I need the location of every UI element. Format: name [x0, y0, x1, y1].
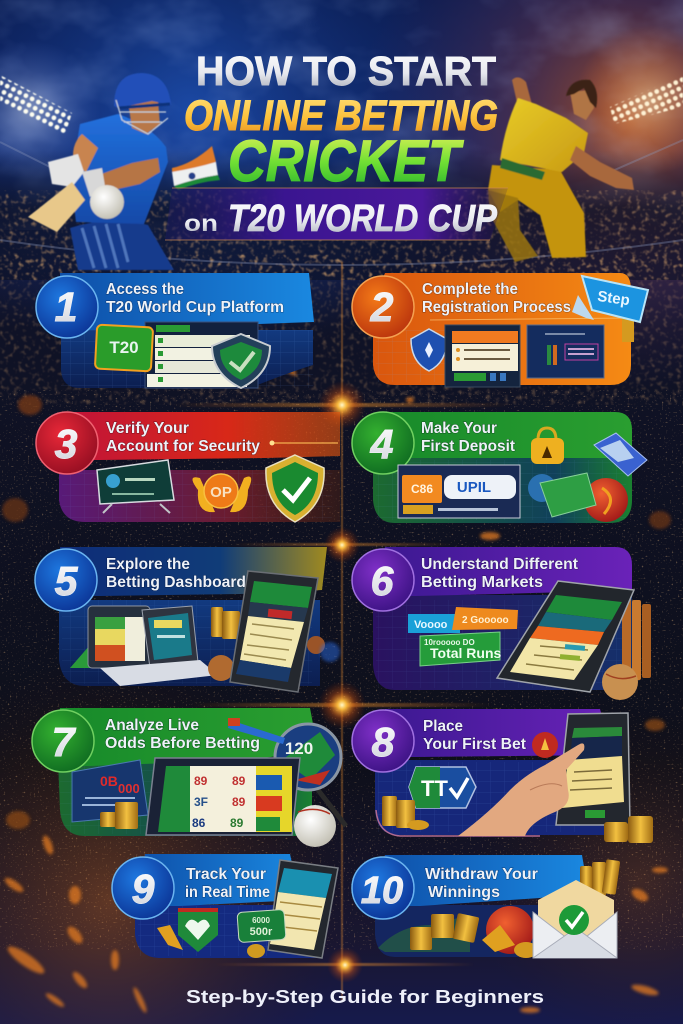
market tags: Voooo [414, 619, 448, 631]
title: How to start online betting cricket on T20 World Cup [165, 48, 508, 240]
panel 6: betting markets [352, 547, 651, 700]
icon: cricket ball [294, 805, 336, 847]
stats screen [527, 325, 604, 378]
footer tagline: Step-by-Step Guide for Beginners [186, 986, 544, 1007]
badge 10 [352, 857, 414, 919]
odds card: 000 [118, 781, 140, 796]
panel 3 background lower [59, 470, 340, 522]
heading 6: Understand Different [421, 556, 578, 573]
phone [556, 713, 630, 825]
heading 2: Complete the [422, 281, 518, 298]
icon: step sign with cursor [572, 276, 648, 342]
title ribbon: on T20 World Cup: on [184, 210, 218, 236]
badge 2 [352, 276, 414, 338]
icon: check shield [266, 455, 324, 522]
phone [230, 571, 318, 692]
badge 9 [112, 857, 174, 919]
panel 9 background lower [135, 905, 320, 958]
icon: red ball with gold [482, 906, 538, 958]
floodlights right [570, 0, 683, 180]
heading 10 [425, 866, 538, 901]
icon: cricket ball [602, 664, 638, 700]
panel 6 background lower [373, 595, 632, 690]
batter arms [73, 134, 98, 172]
form screen [445, 325, 520, 387]
market tags: Total Runs [430, 645, 502, 661]
payment card [398, 465, 520, 518]
icon: blue envelope [594, 433, 647, 476]
phone [268, 860, 338, 958]
badge 6: 6 [371, 558, 395, 604]
heading 9: Track Your [186, 866, 266, 883]
title ribbon: on T20 World Cup [165, 188, 508, 240]
heading 5: Explore the [106, 556, 190, 573]
badge 2: 2 [370, 284, 394, 330]
heading 5 [106, 556, 246, 591]
panel 8 header banner [375, 709, 612, 757]
odds card: 0B [100, 773, 118, 789]
panel 1 header banner [60, 273, 314, 330]
odds tablet: 86 [192, 816, 206, 830]
badge 7: 7 [52, 719, 77, 765]
panel 1: access the platform [36, 273, 314, 388]
panel 3 header banner [60, 412, 340, 460]
heading 6: Betting Markets [421, 574, 543, 591]
title ribbon: on T20 World Cup: T20 WORLD CUP [228, 198, 498, 240]
market tags: 2 Gooooo [462, 615, 509, 626]
odds tablet: 3F [194, 795, 208, 809]
icon: blue shield [411, 329, 447, 371]
cricket ball [90, 185, 124, 219]
badge 1 [36, 276, 98, 338]
bowler belt [500, 158, 545, 180]
panel 10 background lower [375, 905, 585, 957]
icon: monitor [97, 460, 174, 513]
icon: green score card: 500r [250, 926, 273, 938]
market tags: 10rooooo DO [424, 638, 475, 647]
bowler lead arm [570, 146, 634, 190]
badge 8: 8 [372, 719, 395, 765]
panel 8: place first bet [352, 709, 653, 843]
icon: coin stacks [410, 859, 620, 950]
magnifier: 120 [285, 739, 313, 758]
panel 4 header banner [375, 412, 632, 462]
panel 7 header banner [58, 708, 318, 766]
heading 1: T20 World Cup Platform [106, 299, 284, 316]
heading 9: in Real Time [185, 884, 270, 901]
badge 8 [352, 710, 414, 772]
heading 8: Place [423, 718, 463, 735]
heading 7: Odds Before Betting [105, 735, 260, 752]
heading 7 [105, 717, 260, 752]
panel 3: verify account [36, 412, 340, 522]
icon: T20 card [95, 325, 153, 371]
heading 10: Winnings [428, 884, 500, 901]
player: batter in blue [28, 73, 174, 270]
panel 5: dashboard [35, 547, 340, 692]
payment card: UPIL [457, 479, 491, 496]
tablets [88, 606, 218, 686]
badge 9: 9 [132, 866, 155, 912]
badge 7 [32, 710, 94, 772]
badge 3: 3 [55, 421, 78, 467]
window: option list [145, 322, 258, 388]
heading 3: Verify Your [106, 420, 189, 437]
flag of India [172, 146, 220, 190]
panel 7: live odds [32, 708, 346, 847]
icon: red alarm [532, 732, 558, 758]
floodlights left [0, 0, 110, 190]
heading 2 [422, 281, 571, 316]
panel 9 header banner [135, 854, 300, 906]
icon: green note and red ball [528, 473, 628, 522]
batter trousers [70, 221, 174, 270]
icon: T20 card: T20 [109, 338, 139, 357]
title line: online betting: ONLINE BETTING [184, 92, 498, 140]
title line: how to start: HOW TO START [196, 48, 496, 94]
panel 8 background lower [375, 760, 628, 835]
icon: OTP coin: OP [210, 484, 232, 501]
phone [497, 581, 634, 692]
panel 10: withdraw winnings [352, 855, 620, 958]
batter gloves [48, 154, 84, 187]
badge 3 [36, 412, 98, 474]
icon: envelope with tick [533, 880, 617, 958]
icon: OTP coin [192, 474, 251, 512]
bowler shirt [500, 98, 588, 172]
badge: T tick [409, 767, 476, 808]
stadium arc roof lines [0, 140, 683, 265]
heading 1 [106, 281, 284, 316]
panel 5 background lower [59, 600, 320, 686]
odds tablet: 89 [232, 795, 246, 809]
heading 4: First Deposit [421, 438, 515, 455]
heading 7: Analyze Live [105, 717, 199, 734]
icon: coin stack [604, 816, 653, 843]
heading 5: Betting Dashboard [106, 574, 246, 591]
icon: green score card [237, 909, 286, 943]
heading 1: Access the [106, 281, 184, 298]
icon: padlock [531, 428, 564, 464]
heading 8: Your First Bet [423, 736, 526, 753]
badge 10: 10 [361, 870, 403, 912]
badge: T tick: TT [421, 776, 448, 801]
heading 9 [185, 866, 270, 901]
odds tablet: 89 [232, 774, 246, 788]
heading 4 [421, 420, 515, 455]
icon: green score card: 6000 [252, 916, 270, 925]
payment card: C86 [411, 482, 433, 496]
market tags [408, 607, 518, 666]
batter face [128, 100, 160, 134]
player: bowler in yellow [488, 77, 634, 262]
icon: cricket balls [208, 636, 340, 681]
badge 5: 5 [55, 558, 79, 604]
badge 1: 1 [55, 284, 77, 330]
magnifier [228, 718, 346, 826]
icon: gold nugget [247, 944, 265, 958]
icon: green shield [212, 334, 270, 388]
panel 2: complete registration [352, 273, 648, 387]
panel 4 background lower [373, 455, 632, 523]
badge 4: 4 [370, 421, 394, 467]
heading 6 [421, 556, 578, 591]
badge 4 [352, 412, 414, 474]
panel 4: first deposit [352, 412, 647, 523]
bowler raised arm [512, 77, 534, 122]
panel 5 header banner [60, 547, 327, 596]
heading 8 [423, 718, 526, 753]
heading 3 [106, 420, 260, 455]
odds tablet: 89 [230, 816, 244, 830]
panel 6 header banner [373, 547, 632, 596]
icon: green heart shield [157, 908, 218, 952]
bowler trousers [488, 165, 586, 258]
icon: coins [382, 796, 429, 830]
heading 2: Registration Process [422, 299, 571, 316]
panel 7 background lower [58, 760, 312, 836]
title line: cricket: CRICKET [228, 129, 464, 194]
icon: coins [100, 802, 138, 829]
bowler head [570, 90, 594, 120]
odds card [72, 760, 148, 822]
panel 9: track in real time [112, 854, 338, 958]
panel 2 background [373, 273, 631, 385]
odds tablet [146, 758, 300, 835]
panel 1 background [61, 330, 313, 388]
icon: coins [211, 607, 240, 639]
central light line with flares [172, 262, 512, 1002]
bat [28, 182, 85, 232]
icon: hand tapping [458, 743, 584, 836]
heading 10: Withdraw Your [425, 866, 538, 883]
heading 4: Make Your [421, 420, 497, 437]
batter shirt [74, 114, 168, 224]
odds tablet: 89 [194, 774, 208, 788]
ember streaks [2, 363, 671, 1014]
icon: step sign with cursor: Step [596, 288, 631, 309]
stumps [622, 598, 651, 680]
badge 6 [352, 549, 414, 611]
heading 3: Account for Security [106, 438, 260, 455]
panel 10 header banner [375, 855, 588, 906]
batter helmet [114, 73, 171, 108]
badge 5 [35, 549, 97, 611]
